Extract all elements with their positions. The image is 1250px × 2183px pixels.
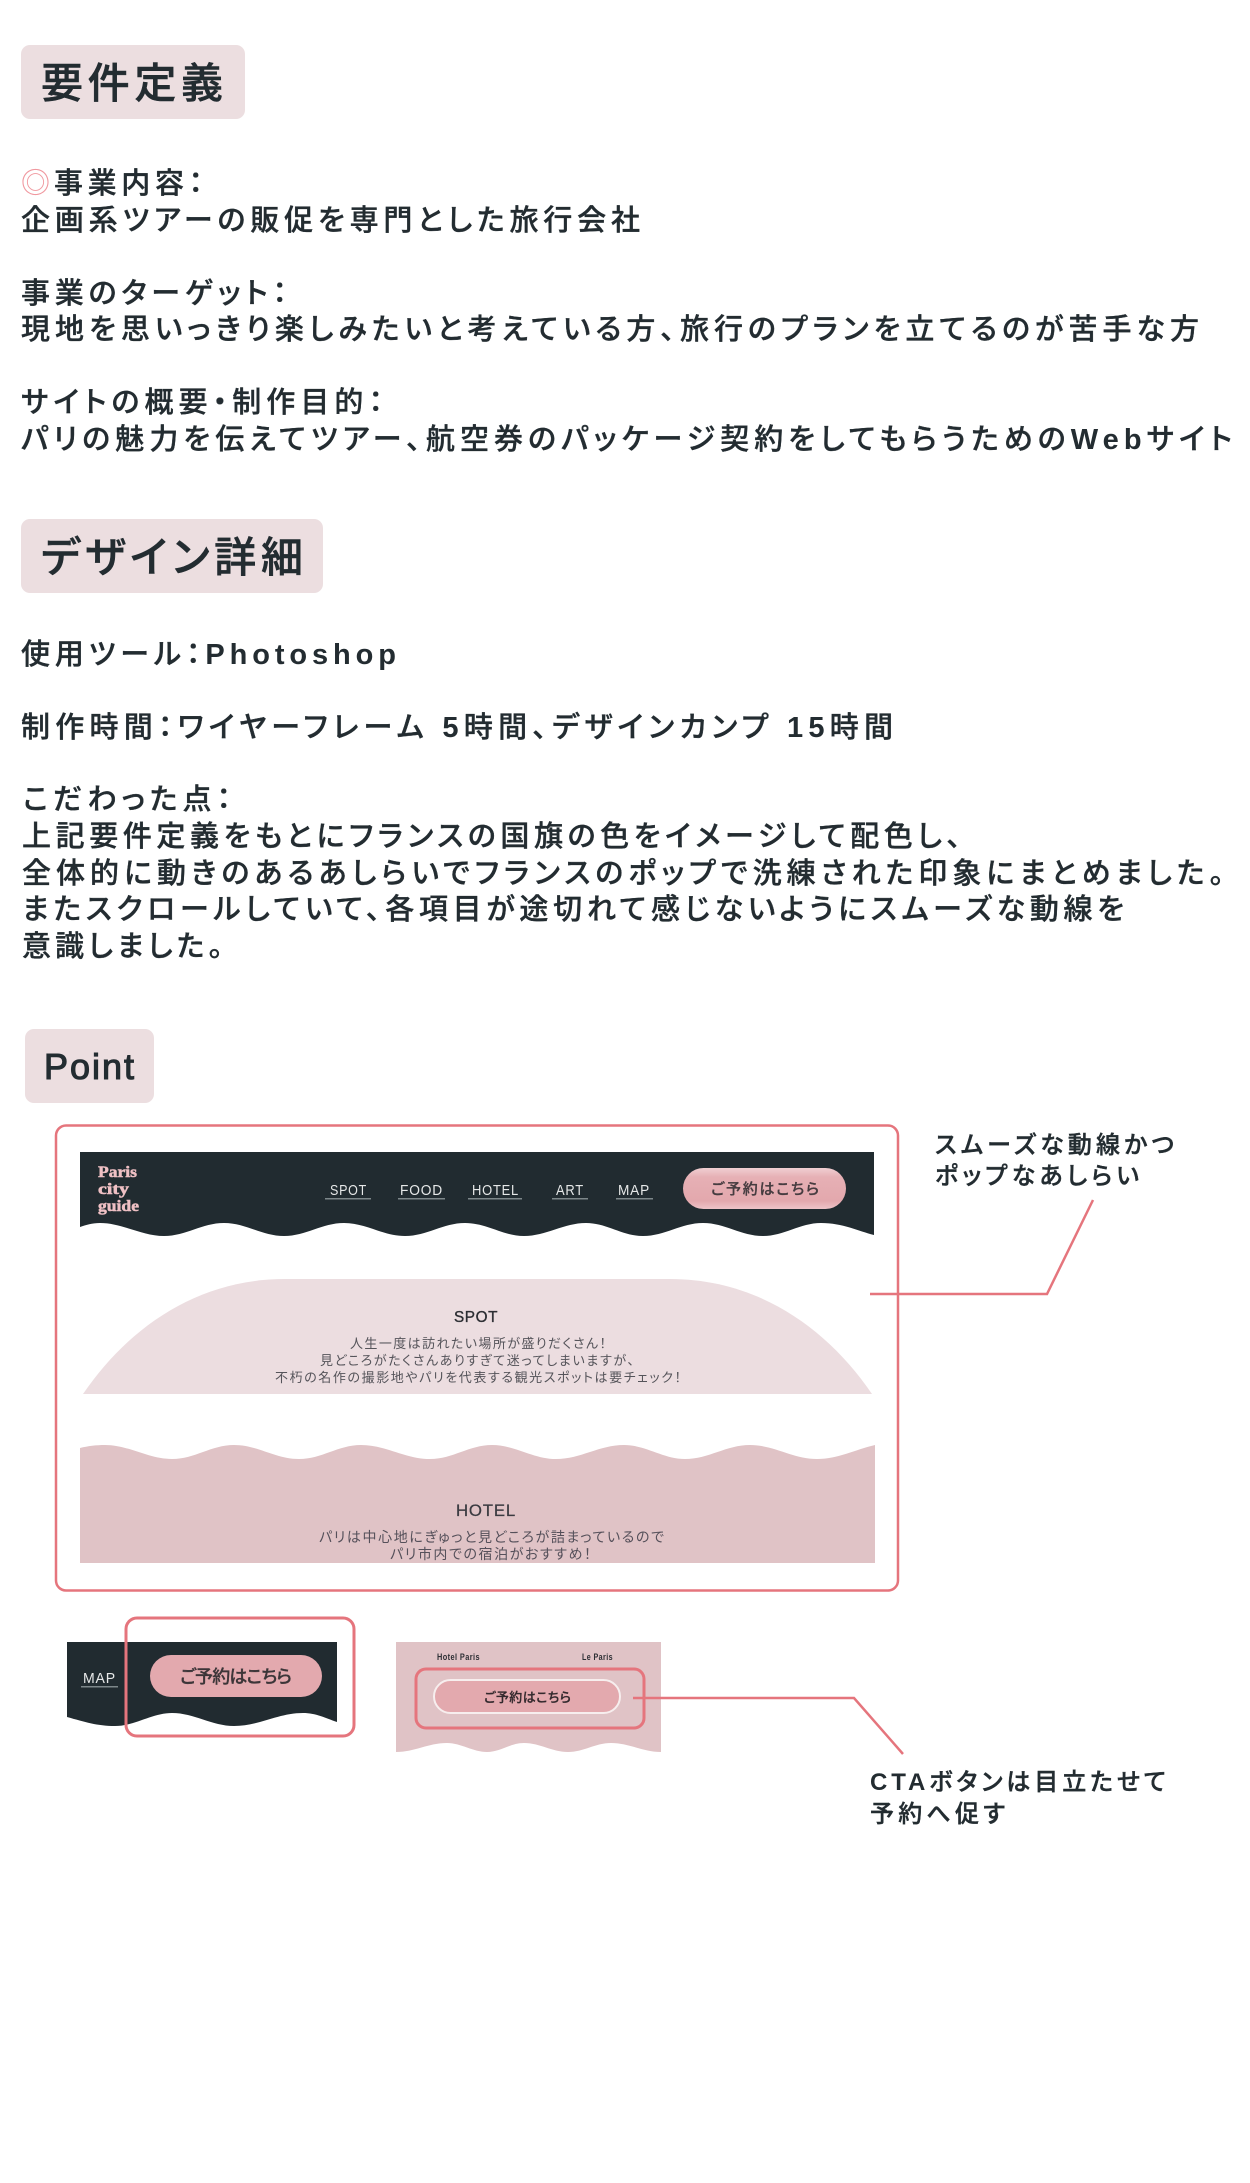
callout: smooth flow text xyxy=(935,1132,1174,1190)
CTA example: hotel button xyxy=(396,1642,661,1752)
highlight frame xyxy=(56,1126,898,1590)
CTA example: header button: ご予約はこちら xyxy=(180,1667,292,1687)
section: SPOT: SPOT xyxy=(454,1309,498,1326)
text block: 制作時間: 制作時間：ワイヤーフレーム 5時間、デザインカンプ 15時間 xyxy=(21,711,893,744)
text block: 事業のターゲット: 現地を思いっきり楽しみたいと考えている方、旅行のプランを立てるのが苦手な方 xyxy=(21,313,1199,346)
callout: smooth flow leader line xyxy=(870,1200,1093,1294)
navigation header: FOOD xyxy=(400,1182,443,1199)
text block: こだわった点: 全体的に動きのあるあしらいでフランスのポップで洗練された印象にまとめました。 xyxy=(22,857,1224,890)
text block: こだわった点: 意識しました。 xyxy=(22,930,223,963)
text block: 事業のターゲット xyxy=(21,277,1199,346)
section: SPOT xyxy=(83,1279,872,1394)
heading: デザイン詳細: デザイン詳細 xyxy=(41,534,303,581)
section: HOTEL: パリ市内での宿泊がおすすめ！ xyxy=(390,1546,591,1562)
text block: こだわった点 xyxy=(22,783,1224,963)
heading: 要件定義: 要件定義 xyxy=(41,60,223,107)
heading: 要件定義 xyxy=(21,45,245,119)
text block: こだわった点: 上記要件定義をもとにフランスの国旗の色をイメージして配色し、 xyxy=(22,820,961,853)
text block: サイトの概要・制作目的 xyxy=(21,386,1232,456)
CTA example: hotel button: ご予約はこちら xyxy=(484,1690,571,1705)
text block: 事業内容: 企画系ツアーの販促を専門とした旅行会社 xyxy=(21,204,640,237)
callout: CTA text xyxy=(870,1769,1166,1828)
button: reservation xyxy=(683,1168,846,1209)
callout: CTA text: CTAボタンは目立たせて xyxy=(870,1769,1166,1796)
navigation header xyxy=(80,1152,874,1236)
text block: 事業内容 xyxy=(21,167,640,237)
navigation header: MAP xyxy=(618,1182,650,1199)
text block: 事業内容: 事業内容： xyxy=(54,167,203,200)
text block: サイトの概要・制作目的: サイトの概要・制作目的： xyxy=(21,386,383,419)
navigation header: city xyxy=(98,1181,129,1198)
text block: こだわった点: こだわった点： xyxy=(23,783,231,816)
heading: デザイン詳細 xyxy=(21,519,323,593)
navigation header: HOTEL xyxy=(472,1182,519,1199)
button: reservation: ご予約はこちら xyxy=(711,1180,819,1198)
text block: 事業のターゲット: 事業のターゲット： xyxy=(21,277,287,310)
heading: Point xyxy=(25,1029,154,1103)
text block: サイトの概要・制作目的: パリの魅力を伝えてツアー、航空券のパッケージ契約をしてもらうためのWebサイト xyxy=(21,423,1232,456)
text block: 使用ツール: 使用ツール：Photoshop xyxy=(21,638,396,671)
callout: smooth flow text: スムーズな動線かつ xyxy=(935,1132,1174,1159)
navigation header: guide xyxy=(98,1198,139,1215)
panel: site design overview xyxy=(56,1126,898,1590)
heading: Point: Point xyxy=(44,1046,134,1087)
section: HOTEL xyxy=(80,1445,875,1563)
section: SPOT: 人生一度は訪れたい場所が盛りだくさん！ xyxy=(350,1336,606,1351)
section: HOTEL: パリは中心地にぎゅっと見どころが詰まっているので xyxy=(319,1529,664,1545)
CTA example: header button: MAP xyxy=(83,1670,116,1687)
section: SPOT: 不朽の名作の撮影地やパリを代表する観光スポットは要チェック！ xyxy=(275,1370,681,1385)
CTA example: hotel button: Le Paris xyxy=(582,1652,613,1662)
CTA example: header button xyxy=(67,1618,354,1736)
callout: CTA text: 予約へ促す xyxy=(870,1801,1005,1828)
text block: こだわった点: またスクロールしていて、各項目が途切れて感じないようにスムーズな動線を xyxy=(22,893,1124,926)
navigation header: SPOT xyxy=(330,1182,367,1199)
section: SPOT: 見どころがたくさんありすぎて迷ってしまいますが、 xyxy=(320,1353,634,1368)
text block: 事業内容: ◎ xyxy=(21,168,50,200)
section: HOTEL: HOTEL xyxy=(456,1501,516,1520)
callout: CTA leader line xyxy=(633,1698,903,1754)
callout: smooth flow text: ポップなあしらい xyxy=(935,1163,1139,1190)
navigation header: Paris xyxy=(98,1164,137,1181)
navigation header: ART xyxy=(556,1182,584,1199)
CTA example: hotel button: Hotel Paris xyxy=(437,1652,480,1662)
